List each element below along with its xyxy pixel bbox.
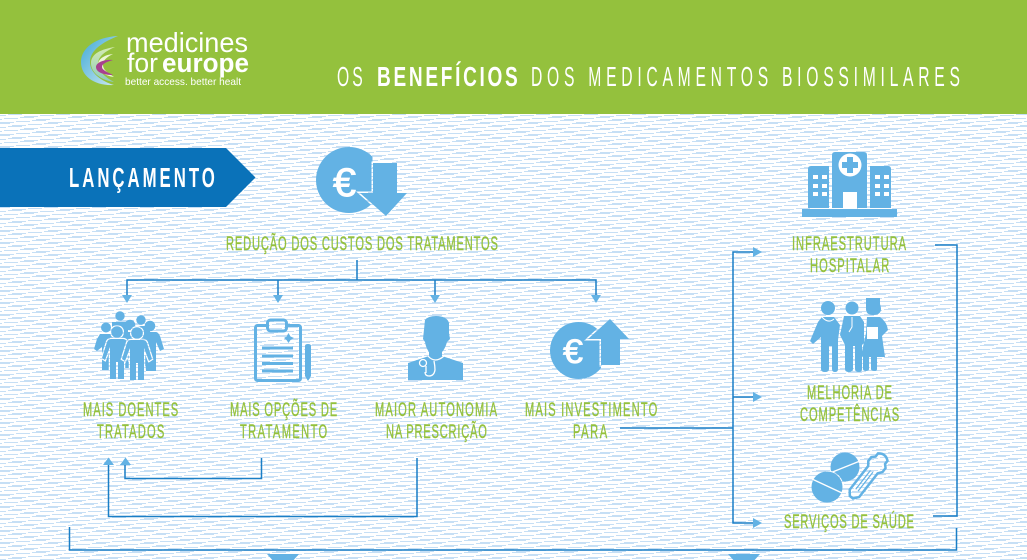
- label: improved skills: MELHORIA DE: [807, 383, 892, 404]
- arrow: bottom right triangle: [728, 554, 760, 560]
- icon: pills and ampoule: [812, 450, 891, 503]
- label: greater prescribing autonomy: [375, 400, 497, 443]
- patterned background: [0, 114, 1027, 560]
- heading: cost reduction: REDUÇÃO DOS CUSTOS DOS TRATAMENTOS: [226, 230, 498, 255]
- logo: medicines for europe: better access. better healt: [125, 76, 241, 88]
- icon: doctor: [408, 316, 463, 380]
- icon: healthcare team: [810, 298, 888, 372]
- icon: euro with up arrow: [550, 319, 629, 379]
- title: DOS MEDICAMENTOS BIOSSIMILARES: [531, 60, 960, 92]
- label: more investment for: [525, 400, 657, 443]
- label: hospital infrastructure: HOSPITALAR: [810, 256, 889, 277]
- header band: [0, 0, 1027, 114]
- icon: euro with up arrow: €: [563, 333, 583, 371]
- logo: medicines for europe: medicines: [126, 27, 248, 58]
- title: OS: [337, 60, 363, 92]
- arrow: bottom left triangle: [267, 554, 299, 560]
- icon: group of patients: [94, 311, 164, 380]
- label: hospital infrastructure: [792, 234, 906, 277]
- logo: medicines for europe: europe: [162, 48, 249, 78]
- label: greater prescribing autonomy: NA PRESCRIÇÃO: [386, 418, 487, 443]
- label: more patients treated: TRATADOS: [97, 422, 164, 443]
- label: more treatment options: [230, 396, 337, 443]
- title: [337, 60, 960, 93]
- title: BENEFÍCIOS: [377, 60, 518, 93]
- banner: lançamento: LANÇAMENTO: [69, 162, 215, 193]
- bracket: right side connector: [933, 245, 957, 516]
- bracket: bottom connector: [70, 527, 956, 550]
- label: improved skills: COMPETÊNCIAS: [800, 403, 899, 426]
- arrows: investment branching to three benefits: [620, 247, 762, 528]
- label: more treatment options: TRATAMENTO: [240, 422, 327, 443]
- icon: hospital: [802, 152, 897, 217]
- logo: medicines for europe: for: [127, 48, 158, 78]
- arrow: prescribing autonomy back to patients: [103, 458, 417, 516]
- banner: lançamento: [0, 148, 256, 207]
- label: more treatment options: MAIS OPÇÕES DE: [230, 396, 337, 421]
- label: health services: SERVIÇOS DE SAÚDE: [784, 510, 914, 533]
- label: more investment for: PARA: [573, 422, 607, 443]
- icon: clipboard and pen: [256, 320, 311, 381]
- label: more patients treated: [83, 400, 178, 443]
- label: improved skills: [800, 383, 899, 426]
- label: hospital infrastructure: INFRAESTRUTURA: [792, 234, 906, 255]
- label: more investment for: MAIS INVESTIMENTO: [525, 400, 657, 421]
- arrow tree from cost reduction: [122, 260, 601, 303]
- label: more patients treated: MAIS DOENTES: [83, 400, 178, 421]
- icon: euro with down arrow: €: [333, 161, 356, 205]
- arrow: treatment options back to patients: [120, 458, 262, 478]
- label: greater prescribing autonomy: MAIOR AUTONOMIA: [375, 400, 497, 421]
- logo: medicines for europe: [81, 27, 249, 88]
- icon: euro with down arrow: [316, 147, 407, 216]
